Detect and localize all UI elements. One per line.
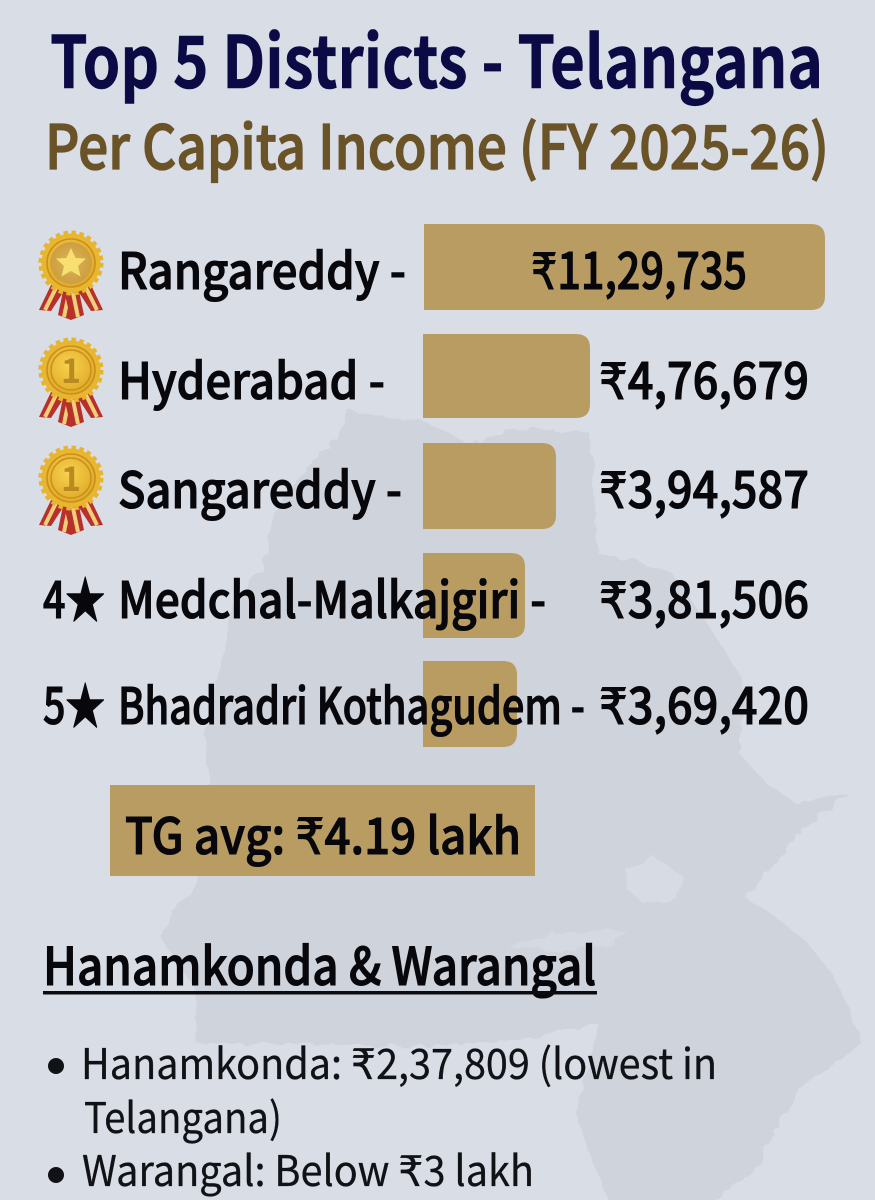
bar: Sangareddy xyxy=(423,443,556,529)
map silhouette of Telangana xyxy=(159,411,862,1200)
rank: 4 star: 4★ xyxy=(43,561,105,633)
label: Bhadradri Kothagudem: Bhadradri Kothagudem - xyxy=(118,667,585,739)
bullet: Hanamkonda xyxy=(48,1031,717,1146)
label: Rangareddy: Rangareddy - xyxy=(118,232,406,304)
icon: gold number one medal xyxy=(39,340,103,427)
value: Hyderabad: ₹4,76,679 xyxy=(599,342,809,414)
icon: gold star medal xyxy=(39,232,103,320)
bar: Bhadradri Kothagudem xyxy=(423,661,517,747)
row 3: Sangareddy xyxy=(39,443,809,535)
icon: gold number one medal xyxy=(39,448,103,535)
value: Bhadradri Kothagudem: ₹3,69,420 xyxy=(599,667,809,739)
row 2: Hyderabad xyxy=(39,334,809,427)
bullet: Warangal: Warangal: Below ₹3 lakh xyxy=(82,1138,534,1199)
label: Medchal-Malkajgiri: Medchal-Malkajgiri - xyxy=(118,561,546,633)
value: Medchal-Malkajgiri: ₹3,81,506 xyxy=(599,561,809,633)
callout: state average: TG avg: ₹4.19 lakh xyxy=(125,797,521,869)
bullet: Hanamkonda: Hanamkonda: ₹2,37,809 (lowest in xyxy=(81,1031,717,1092)
value: Sangareddy: ₹3,94,587 xyxy=(599,451,809,523)
label: Sangareddy: Sangareddy - xyxy=(118,451,402,523)
bar: Medchal-Malkajgiri xyxy=(423,553,525,638)
bar: Rangareddy xyxy=(424,224,825,310)
heading: Hanamkonda & Warangal: Hanamkonda & Warangal xyxy=(43,925,596,1000)
rank: 5 star: 5★ xyxy=(43,667,105,739)
icon: gold number one medal: 1 xyxy=(61,452,81,501)
row 1: Rangareddy xyxy=(39,224,825,320)
label: Hyderabad: Hyderabad - xyxy=(118,342,385,414)
row 4: Medchal-Malkajgiri xyxy=(43,553,809,638)
value: Rangareddy: ₹11,29,735 xyxy=(531,232,747,304)
bar: Hyderabad xyxy=(423,334,590,418)
bullet: Hanamkonda: Telangana) xyxy=(84,1085,282,1146)
row 5: Bhadradri Kothagudem xyxy=(43,661,809,747)
icon: gold number one medal: 1 xyxy=(61,344,81,393)
